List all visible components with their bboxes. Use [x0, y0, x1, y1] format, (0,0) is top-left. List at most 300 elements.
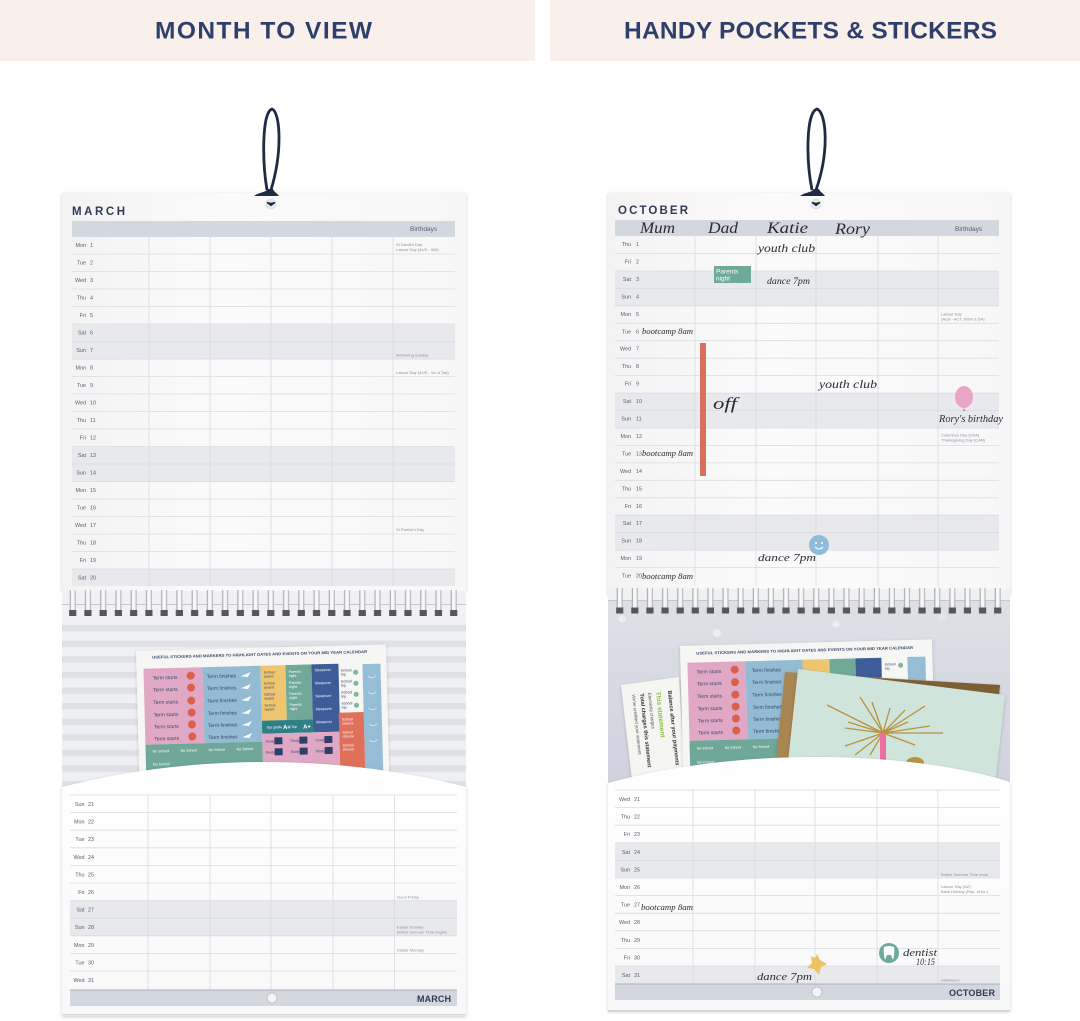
stickers: school closure: closure: [343, 747, 354, 752]
stickers: term finishes: Term finishes: [753, 716, 783, 723]
sheet: march upper page: Fri: [80, 313, 86, 319]
stickers: no school: No School: [237, 747, 253, 751]
stickers: study leave: Study: [266, 750, 275, 755]
stickers: school trip: School: [341, 668, 352, 673]
pocket front left: [62, 762, 466, 1016]
stickers: term finishes: Term finishes: [753, 728, 783, 735]
sheet: october upper page: Mon: [620, 312, 631, 318]
sticker sheet right: [680, 639, 936, 786]
stickers: school award: award: [265, 707, 274, 712]
greeting card: [788, 669, 1005, 785]
stickers: sleepover: Sleepover: [315, 694, 332, 698]
sheet: october lower page: 26: [634, 885, 640, 891]
marker: coral bar: [700, 343, 706, 476]
sheet: october upper page: Mon: [620, 434, 631, 440]
sheet: march lower page: [62, 795, 466, 1016]
pocket: striped backing left: [62, 591, 466, 791]
handwriting: dentist: [903, 948, 937, 967]
stickers: school closure: closure: [342, 734, 354, 739]
stickers: term starts: Term starts: [153, 699, 179, 706]
sheet: october upper page: (AUS - ACT, NSW & SA): [941, 316, 985, 322]
sheet: october lower page: 30: [634, 955, 640, 961]
stickers: parents night: night: [289, 696, 297, 700]
statement paper: We've credited your statement: [631, 694, 643, 756]
sheet: march upper page: Sat: [78, 330, 86, 336]
stickers: term finishes: Term finishes: [208, 734, 238, 741]
stickers: term starts: Term starts: [697, 669, 722, 676]
handwriting: events: Rory's birthday: [938, 414, 1004, 425]
icon: hanging loop right: [800, 109, 825, 196]
heading: month to view: MONTH TO VIEW: [155, 18, 373, 44]
sheet: october lower page: Sun: [620, 867, 630, 873]
stickers: study leave: Study: [290, 739, 300, 743]
stickers: school award: award: [264, 674, 274, 679]
sheet: october lower page: 28: [634, 920, 640, 926]
stickers: school award: School: [264, 692, 275, 697]
stickers: term starts: Term starts: [698, 730, 724, 737]
icon: candle: [880, 733, 886, 765]
sheet: october upper page: Tue: [622, 451, 631, 457]
sheet: october upper page: Sun: [621, 416, 631, 422]
stickers: school trip: School: [341, 701, 353, 706]
sheet: march lower page: Sat: [76, 908, 85, 914]
sheet: march lower page: Thu: [75, 872, 84, 878]
sheet: march lower page: Tue: [75, 960, 84, 966]
sticker sheet left: USEFUL STICKERS AND MARKERS TO HIGHLIGHT DATES AND EVENTS ON YOUR MID YEAR CALENDAR: [152, 649, 367, 660]
sheet: october upper page: Sat: [623, 521, 631, 527]
sticker: parents night: Parents: [716, 268, 739, 276]
stickers: parents night: Parents: [289, 692, 302, 696]
sheet: march lower page: Sun: [75, 802, 84, 808]
sticker: balloon: [955, 386, 973, 411]
sheet: october upper page: 6: [636, 329, 639, 335]
stickers: teacher awards: A+: [283, 725, 291, 731]
heading: month to view: [0, 0, 535, 61]
handwriting: family names: Rory: [834, 221, 871, 238]
sticker: gold star: [807, 954, 827, 975]
sheet: october lower page: 25: [634, 867, 640, 873]
handwriting: events: dance 7pm: [758, 552, 816, 564]
stickers: school award: School: [264, 703, 276, 708]
sheet: march upper page: Wed: [75, 400, 86, 406]
stickers: no school: No School: [153, 749, 169, 754]
sheet: october upper page: Sun: [621, 539, 631, 545]
stickers: term starts: Term starts: [154, 736, 180, 743]
sheet: october upper page: 9: [636, 382, 639, 388]
stickers: study leave: [262, 732, 340, 777]
sheet: october upper page: Mon: [620, 556, 631, 562]
sheet: march lower page: Wed: [74, 978, 84, 984]
sheet: october lower page: Sat: [622, 973, 630, 979]
stickers: teacher awards: Top: [291, 725, 297, 729]
sheet: march upper page: 4: [90, 296, 93, 302]
sheet: october upper page: Thanksgiving Day (CAN): [941, 438, 986, 442]
sheet: october lower page: OCTOBER: [949, 988, 996, 998]
sheet: march lower page: Tue: [75, 837, 84, 843]
sheet: march upper page: Birthdays: [410, 226, 438, 233]
sheet: march upper page: 20: [90, 576, 96, 582]
sheet: october upper page: [608, 193, 1010, 595]
stickers: study leave: Study: [316, 749, 325, 753]
stickers: study leave: Study: [291, 750, 300, 754]
statement paper: Balance after your payments: [666, 690, 680, 766]
sheet: october upper page: 20: [636, 574, 642, 580]
stickers: smileys strip: [362, 664, 383, 774]
sheet: october upper page: 19: [636, 556, 642, 562]
sheet: march upper page: Sun: [76, 348, 86, 354]
sheet: october lower page: 22: [634, 815, 640, 821]
stickers: term finishes: Term finishes: [752, 667, 782, 674]
sheet: october upper page: 8: [636, 364, 639, 370]
sheet: march upper page: St David's Day: [396, 242, 422, 247]
handwriting: events: youth club: [818, 377, 877, 391]
icon: hanging loop left: [254, 109, 279, 196]
sheet: march lower page: 26: [88, 890, 94, 896]
sheet: october upper page: Labour Day: [941, 312, 962, 316]
sheet: october upper page: Birthdays: [955, 226, 983, 233]
sticker: parents night: [714, 266, 751, 283]
stickers: school award: award: [264, 696, 274, 701]
sheet: march upper page: Fri: [80, 558, 86, 564]
sticker: tooth: [879, 943, 899, 963]
sheet: march lower page: 25: [88, 872, 94, 878]
sheet: march upper page: Mon: [76, 366, 86, 372]
sheet: october upper page: Tue: [622, 329, 631, 335]
stickers: term finishes: Term finishes: [753, 704, 783, 711]
sheet: october upper page: 4: [636, 294, 639, 300]
sheet: october upper page: Thu: [622, 486, 631, 492]
stickers: school trip: [341, 668, 359, 710]
sheet: march lower page: 24: [88, 855, 94, 861]
stickers: school award: School: [264, 670, 275, 675]
sheet: october upper page: Columbus Day (USA): [941, 432, 980, 438]
sheet: march lower page: Fri: [78, 890, 84, 896]
sheet: march upper page: Labour Day (AUS - WA): [396, 247, 439, 252]
stickers: term finishes: Term finishes: [208, 710, 238, 717]
sheet: october lower page: 24: [634, 850, 640, 856]
handwriting: dentist: 10:15: [916, 957, 935, 967]
statement paper: Total charges this statement: [638, 693, 652, 768]
stickers: teacher awards: Top grade: [266, 725, 282, 730]
pocket: backing right: [608, 589, 1010, 789]
sheet: october lower page: Wed: [619, 797, 630, 803]
sheet: march upper page: 16: [90, 506, 96, 512]
stickers: no school: [145, 742, 263, 781]
stickers: parents night: Parents: [289, 703, 302, 707]
sheet: march upper page: 2: [90, 260, 93, 266]
sheet: march upper page: 18: [90, 540, 96, 546]
stickers: school award: [260, 665, 287, 721]
sheet: march upper page: Thu: [77, 296, 86, 302]
stickers: no school: No School: [697, 760, 714, 765]
handwriting: family names: Dad: [707, 220, 739, 237]
stickers: term starts: Term starts: [698, 706, 723, 713]
sheet: march upper page: Mothering Sunday: [396, 352, 428, 358]
stickers: top strip: School: [885, 662, 896, 667]
stickers: no school: No School: [725, 745, 742, 750]
sheet: march lower page: 21: [88, 802, 94, 808]
sheet: october upper page: OCTOBER: [618, 205, 689, 217]
sheet: october upper page: Sat: [623, 277, 631, 283]
sheet: october lower page: Labour Day (NZ): [941, 884, 971, 889]
sheet: march upper page: Labour Day (AUS - Vic & Tas): [396, 370, 449, 375]
sheet: march upper page: Wed: [75, 278, 86, 284]
stickers: term starts: Term starts: [154, 712, 179, 719]
sheet: october upper page: 11: [636, 416, 642, 422]
stickers: term starts: Term starts: [698, 718, 723, 725]
panel: october calendar: [608, 109, 1010, 1012]
sheet: march lower page: Easter Monday: [397, 948, 424, 952]
stickers: sleepover: Sleepover: [316, 707, 333, 711]
stickers: parents night: night: [290, 707, 297, 711]
sheet: october lower page: Sat: [622, 850, 630, 856]
stickers: parents night: Parents: [289, 670, 301, 674]
sheet: march upper page: 9: [90, 383, 93, 389]
sheet: march upper page: [62, 193, 466, 591]
panel: march calendar: [62, 109, 466, 1016]
stickers: school closure: School: [342, 743, 354, 748]
sheet: march upper page: 5: [90, 313, 93, 319]
sheet: march lower page: Mon: [74, 943, 84, 949]
handwriting: dentist: dentist: [903, 948, 937, 959]
stickers: sleepover: [311, 664, 340, 732]
stickers: study leave: Study: [265, 739, 275, 744]
sheet: march lower page: British Summer Time begins: [397, 930, 447, 934]
sheet: march lower page: 30: [88, 960, 94, 966]
sheet: october lower page: Thu: [621, 815, 630, 821]
pocket front right: [608, 757, 1010, 1011]
heading: handy pockets and stickers: HANDY POCKETS & STICKERS: [624, 18, 997, 44]
sheet: october lower page: 23: [634, 832, 640, 838]
handwriting: events: youth club: [757, 241, 815, 255]
handwriting: family names: Katie: [766, 220, 808, 237]
stickers: school closure: School: [342, 730, 353, 735]
sheet: october upper page: Sun: [621, 294, 631, 300]
sheet: october upper page: 14: [636, 469, 642, 475]
sheet: october lower page: Wed: [619, 920, 630, 926]
sheet: october upper page: Sat: [623, 399, 631, 405]
stickers: study leave: Study: [315, 738, 325, 742]
stickers: school trip: trip: [342, 706, 347, 710]
stickers: term finishes: Term finishes: [207, 698, 237, 705]
stickers: term finishes: Term finishes: [752, 679, 782, 686]
sheet: march upper page: MARCH: [72, 206, 125, 218]
sheet: october upper page: Tue: [622, 574, 631, 580]
sheet: march lower page: Wed: [74, 855, 84, 861]
stickers: term finishes: Term finishes: [207, 685, 237, 692]
stickers: school closure: School: [342, 717, 353, 722]
sheet: october upper page: Fri: [625, 260, 631, 266]
sheet: october upper page: Fri: [625, 382, 631, 388]
sheet: october lower page: Bank Holiday (Rep. of Ire.): [941, 889, 989, 894]
sticker: parents night: night: [716, 276, 730, 282]
sheet: march lower page: 29: [88, 943, 94, 949]
stickers: sleepover: Sleepover: [315, 668, 332, 672]
sheet: october lower page: 29: [634, 938, 640, 944]
sheet: march lower page: 23: [88, 837, 94, 843]
sheet: march upper page: Sat: [78, 453, 86, 459]
stickers: teacher awards: [262, 719, 313, 734]
stickers: school trip: trip: [341, 695, 346, 699]
stickers: term starts: Term starts: [153, 675, 178, 682]
stickers: term finishes: Term finishes: [207, 673, 237, 680]
stickers: top strip: [802, 657, 926, 686]
sheet: october upper page: 3: [636, 277, 639, 283]
sheet: march upper page: 8: [90, 366, 93, 372]
stickers: term starts: Term starts: [697, 681, 722, 688]
sheet: october lower page: Halloween: [941, 978, 960, 982]
stickers: school trip: School: [341, 679, 352, 684]
sheet: october upper page: 1: [636, 242, 639, 248]
handwriting: dance: dance 7pm: [757, 971, 812, 983]
stickers: school trip: School: [341, 690, 352, 695]
sheet: march upper page: 13: [90, 453, 96, 459]
binding: spiral wire left: [67, 590, 463, 618]
stickers: school trip: trip: [341, 673, 346, 677]
sheet: october upper page: 17: [636, 521, 642, 527]
handwriting: family names: Mum: [639, 220, 675, 237]
sheet: march lower page: Mon: [74, 820, 84, 826]
stickers: sleepover: Sleepover: [315, 681, 332, 685]
sheet: october lower page: 31: [634, 973, 640, 979]
sheet: march upper page: Tue: [77, 383, 86, 389]
sheet: march lower page: Easter Sunday: [397, 924, 423, 930]
stickers: parents night: Parents: [289, 681, 302, 685]
sheet: march lower page: Sun: [75, 925, 84, 931]
icon: sparkler: [827, 697, 943, 755]
stickers: term starts: Term starts: [154, 724, 179, 731]
statement paper: [621, 677, 684, 780]
sheet: march upper page: Tue: [77, 260, 86, 266]
binding: spiral wire right: [614, 588, 1004, 615]
stickers: parents night: [285, 664, 313, 720]
sheet: march upper page: Fri: [80, 436, 86, 442]
stickers: school award: School: [264, 681, 275, 686]
stickers: no school: No School: [697, 746, 714, 751]
stickers: term starts: Term starts: [153, 687, 178, 694]
sheet: october upper page: Thu: [622, 242, 631, 248]
sheet: october upper page: 18: [636, 539, 642, 545]
handwriting: events: bootcamp 8am: [642, 571, 693, 581]
sheet: october lower page: Mon: [620, 885, 630, 891]
handwriting: events: dance 7pm: [767, 276, 811, 286]
sheet: march upper page: 3: [90, 278, 93, 284]
sheet: october upper page: 15: [636, 486, 642, 492]
stickers: parents night: night: [289, 674, 297, 678]
sheet: october lower page: Tue: [621, 903, 630, 909]
handwriting: bootcamp: bootcamp 8am: [641, 902, 693, 912]
sheet: march upper page: Mon: [76, 488, 86, 494]
sheet: march upper page: 10: [90, 400, 96, 406]
stickers: top strip: trip: [885, 667, 890, 671]
sheet: march upper page: 14: [90, 470, 96, 476]
sheet: march lower page: 28: [88, 925, 94, 931]
sheet: october upper page: 13: [636, 451, 642, 457]
sheet: october lower page: 27: [634, 903, 640, 909]
sheet: october lower page: [608, 790, 1010, 1012]
sheet: march upper page: Sun: [76, 470, 86, 476]
sheet: march upper page: 17: [90, 523, 96, 529]
handwriting: events: bootcamp 8am: [642, 326, 693, 336]
sheet: october upper page: Wed: [620, 469, 631, 475]
stickers: no school: No School: [181, 748, 197, 753]
sheet: october upper page: 12: [636, 434, 642, 440]
handwriting: events: off: [713, 394, 740, 413]
stickers: no school: No School: [209, 748, 225, 752]
stickers: no school: No School: [153, 762, 170, 767]
stickers: term finishes: [202, 666, 262, 743]
stickers: term starts: [143, 667, 204, 745]
sheet: march lower page: MARCH: [417, 994, 451, 1004]
sheet: march lower page: Good Friday: [397, 894, 419, 900]
sheet: march lower page: 22: [88, 820, 94, 826]
envelope: [775, 672, 1000, 785]
sheet: october lower page: 21: [634, 797, 640, 803]
sheet: march upper page: Sat: [78, 576, 86, 582]
sheet: october upper page: 7: [636, 347, 639, 353]
sheet: march upper page: 15: [90, 488, 96, 494]
stickers: term starts: [687, 661, 747, 741]
sticker sheet left: [136, 644, 389, 786]
sheet: march upper page: Thu: [77, 540, 86, 546]
sheet: october upper page: 16: [636, 504, 642, 510]
sheet: october upper page: Wed: [620, 347, 631, 353]
stickers: no school: No School: [753, 745, 770, 749]
handwriting: family names: [639, 220, 871, 238]
sheet: october upper page: 10: [636, 399, 642, 405]
stickers: no school: [689, 738, 806, 786]
stickers: term finishes: Term finishes: [752, 692, 782, 699]
sticker sheet right: USEFUL STICKERS AND MARKERS TO HIGHLIGHT DATES AND EVENTS ON YOUR MID YEAR CALENDAR: [696, 645, 913, 656]
heading: handy pockets and stickers: [550, 0, 1080, 61]
stickers: sleepover: Sleepover: [316, 720, 333, 724]
sheet: march upper page: Wed: [75, 523, 86, 529]
statement paper: This statement: [654, 691, 666, 739]
sheet: march upper page: 19: [90, 558, 96, 564]
sheet: march lower page: 31: [88, 978, 94, 984]
sheet: march upper page: Mon: [76, 243, 86, 249]
sheet: october upper page: 5: [636, 312, 639, 318]
stickers: school closure: closure: [342, 721, 354, 726]
sheet: march upper page: St Patrick's Day: [396, 527, 424, 532]
handwriting: events: bootcamp 8am: [642, 448, 693, 458]
sheet: march upper page: 6: [90, 330, 93, 336]
stickers: teacher awards: A+: [303, 724, 311, 731]
sheet: march upper page: 1: [90, 243, 93, 249]
sheet: march upper page: 7: [90, 348, 93, 354]
sheet: october lower page: British Summer Time ends: [941, 872, 988, 877]
sheet: march upper page: 12: [90, 436, 96, 442]
stickers: school closure: [339, 712, 365, 775]
sheet: march upper page: Tue: [77, 506, 86, 512]
sticker: smiley: [809, 535, 829, 555]
statement paper: Electricity charges: [647, 692, 656, 730]
sheet: october lower page: Fri: [624, 955, 630, 961]
sheet: october lower page: Fri: [624, 832, 630, 838]
stickers: school award: award: [264, 685, 274, 690]
stickers: term starts: Term starts: [697, 693, 723, 700]
stickers: school trip: trip: [341, 684, 346, 688]
stickers: term finishes: [745, 660, 804, 739]
sheet: october upper page: 2: [636, 260, 639, 266]
stickers: term finishes: Term finishes: [208, 722, 238, 729]
sheet: october lower page: Thu: [621, 938, 630, 944]
sheet: march upper page: 11: [90, 418, 96, 424]
stickers: parents night: night: [289, 685, 297, 689]
handwriting: events: [642, 241, 1004, 581]
sheet: march lower page: 27: [88, 908, 94, 914]
sheet: october upper page: Fri: [625, 504, 631, 510]
